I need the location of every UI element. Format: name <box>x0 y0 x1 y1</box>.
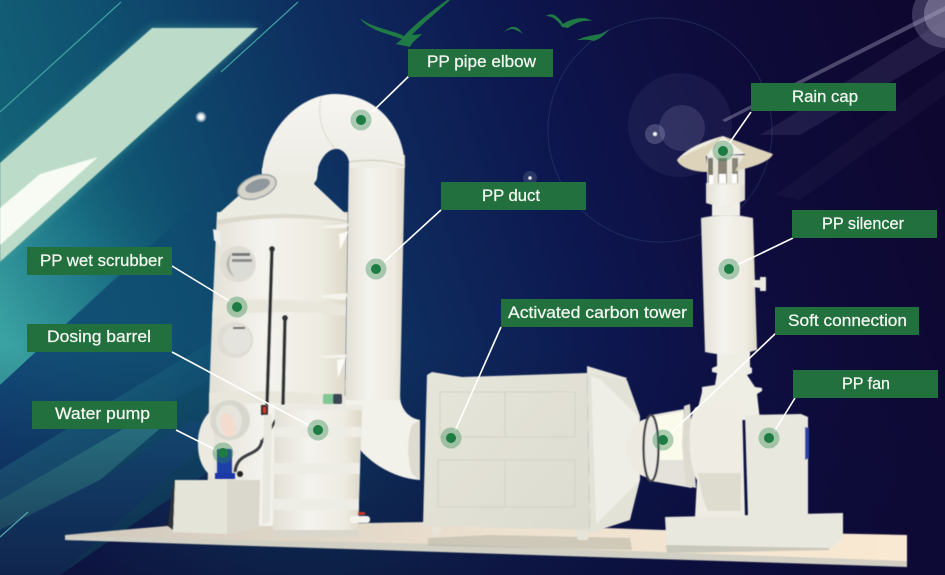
label: Rain cap <box>751 83 896 111</box>
marker: PP duct <box>366 258 386 280</box>
marker: rain cap <box>712 140 734 162</box>
top right flare <box>722 0 945 200</box>
flange ring <box>627 418 650 478</box>
vertical duct <box>345 155 405 400</box>
fan base <box>665 513 843 553</box>
white streak <box>0 157 98 245</box>
stack transition <box>695 350 762 420</box>
label: PP pipe elbow <box>408 49 553 77</box>
fan scroll <box>690 401 745 517</box>
fan flange <box>682 404 696 488</box>
label: Activated carbon tower: Activated carbon tower <box>508 304 688 322</box>
callout lines <box>172 76 795 450</box>
PP silencer <box>701 215 766 355</box>
marker: PP pipe elbow <box>350 110 372 130</box>
PP duct and elbow <box>262 94 420 480</box>
portholes <box>220 246 256 282</box>
elbow <box>262 94 405 181</box>
label: PP wet scrubber: PP wet scrubber <box>40 252 164 270</box>
marker: soft connection <box>652 430 674 450</box>
marker: water pump <box>212 442 234 464</box>
tower cone <box>217 168 347 224</box>
marker: PP silencer <box>718 258 740 280</box>
label: PP silencer <box>792 210 937 238</box>
lens flare <box>523 18 772 242</box>
label: Dosing barrel <box>27 324 172 352</box>
bottom bend <box>345 380 420 480</box>
label: Water pump: Water pump <box>55 405 150 423</box>
label: PP silencer: PP silencer <box>822 215 904 233</box>
PP fan <box>665 401 843 553</box>
dosing barrel <box>272 394 370 537</box>
base plate <box>65 522 907 567</box>
tank box <box>173 480 260 534</box>
label: Soft connection <box>775 307 919 335</box>
access panels <box>438 392 575 507</box>
tower body <box>207 212 348 526</box>
light streak panel <box>0 2 298 537</box>
birds <box>360 0 610 47</box>
star <box>195 111 207 123</box>
dark pipes <box>267 249 272 405</box>
label: PP duct: PP duct <box>482 187 540 205</box>
rain cap <box>677 136 773 216</box>
label: PP fan <box>793 370 938 398</box>
side brackets <box>323 223 353 228</box>
motor housing <box>745 414 808 518</box>
label: Water pump <box>32 401 177 429</box>
top flange <box>234 170 280 204</box>
water pump and tank <box>168 405 276 534</box>
label: Dosing barrel: Dosing barrel <box>47 328 151 346</box>
pump <box>217 449 232 475</box>
ring bands <box>212 299 346 318</box>
label: PP pipe elbow: PP pipe elbow <box>427 53 536 71</box>
label: PP wet scrubber <box>27 247 172 275</box>
label: Activated carbon tower <box>501 299 693 327</box>
label: Rain cap: Rain cap <box>792 88 858 106</box>
marker: dosing barrel <box>308 420 328 440</box>
label: Soft connection: Soft connection <box>788 312 907 330</box>
dosing pump <box>323 394 335 404</box>
drain valve <box>350 516 370 523</box>
activated carbon tower <box>423 366 640 550</box>
label: PP fan: PP fan <box>842 375 890 393</box>
marker: PP wet scrubber <box>226 296 248 318</box>
marker: activated carbon tower <box>440 428 462 448</box>
marker: PP fan <box>758 428 780 448</box>
label: PP duct <box>441 182 586 210</box>
wet scrubber tower <box>198 168 353 526</box>
soft connection <box>627 409 692 488</box>
